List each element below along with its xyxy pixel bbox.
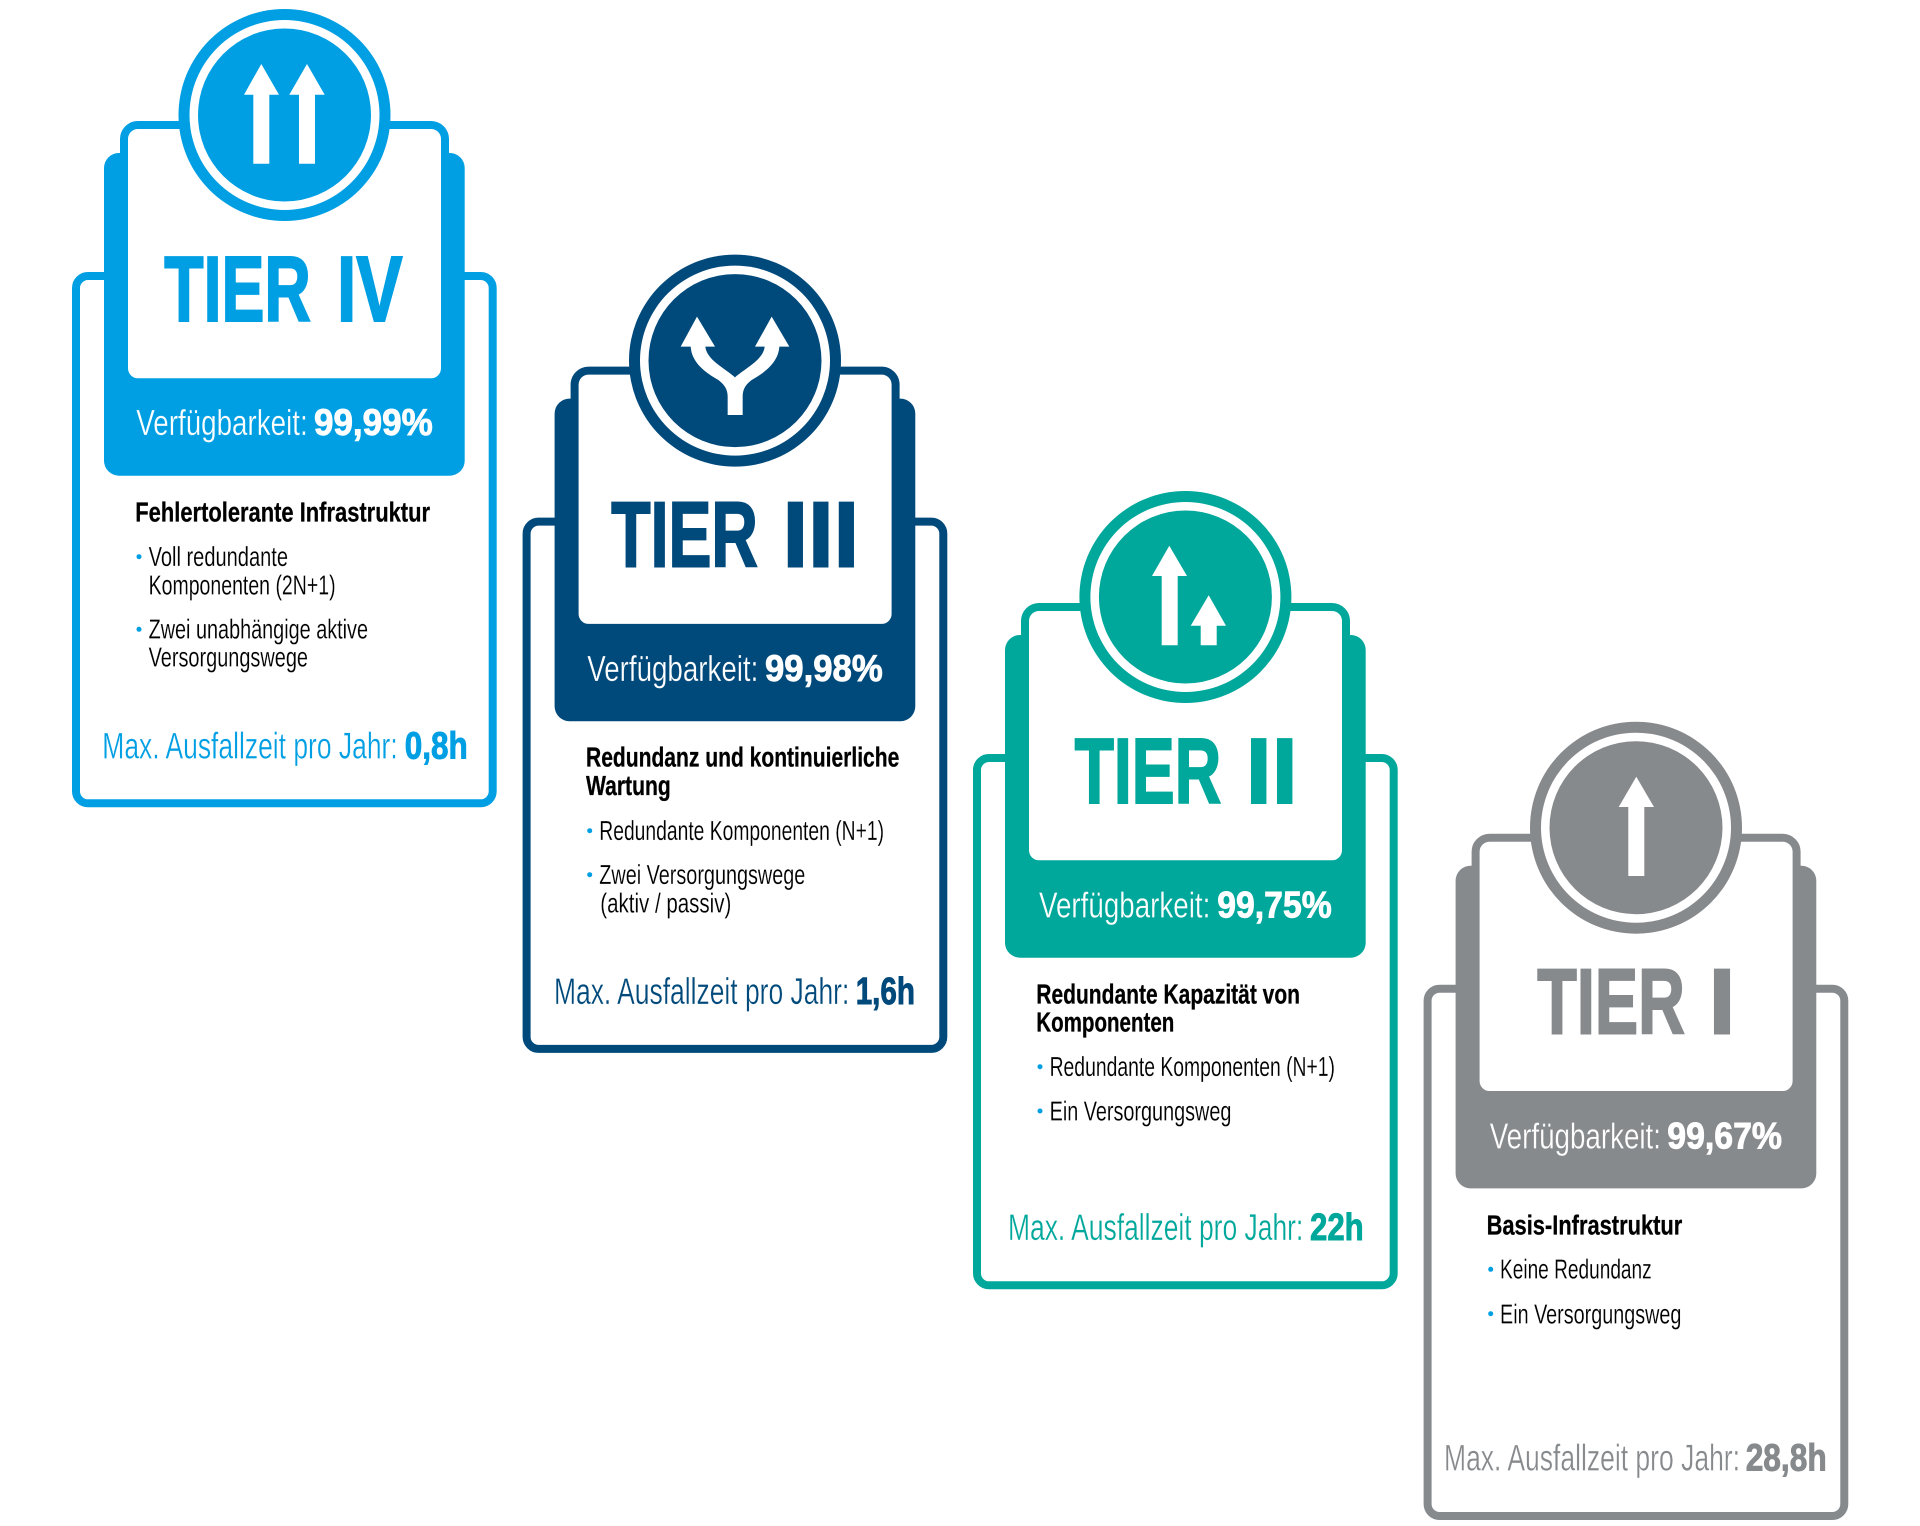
- heading: TIER II: TIER: [1075, 719, 1221, 823]
- bullet list: [587, 815, 884, 919]
- heading: TIER III: III: [783, 482, 859, 586]
- panel: Tier II: [977, 491, 1394, 1285]
- availability band: [1456, 866, 1816, 1188]
- availability label: Verfügbarkeit:: [1039, 885, 1210, 926]
- description heading: [586, 742, 899, 801]
- description heading: Redundanz und kontinuierliche: [586, 742, 899, 773]
- downtime value: 0,8h: [405, 725, 468, 767]
- description heading: Redundante Kapazität von: [1036, 978, 1300, 1009]
- card outline: [527, 522, 943, 1049]
- availability value: 99,98%: [765, 648, 883, 689]
- bullet list: (aktiv / passiv): [600, 888, 731, 919]
- description heading: [1036, 978, 1300, 1038]
- icon: single up arrow: [1530, 722, 1742, 934]
- heading: TIER I: TIER: [1537, 949, 1685, 1053]
- bullet list: Redundante Komponenten (N+1): [1050, 1051, 1335, 1082]
- title plate: [1025, 607, 1346, 864]
- title plate: [124, 125, 445, 382]
- availability band: [104, 153, 465, 476]
- bullet list: Zwei Versorgungswege: [599, 859, 805, 890]
- bullet list: Ein Versorgungsweg: [1050, 1095, 1231, 1126]
- downtime label: Max. Ausfallzeit pro Jahr:: [102, 724, 398, 766]
- icon: forking arrows: [629, 255, 841, 467]
- availability value: 99,67%: [1667, 1115, 1782, 1156]
- bullet list: Redundante Komponenten (N+1): [599, 815, 884, 846]
- description heading: Basis-Infrastruktur: [1487, 1209, 1682, 1240]
- card outline: [76, 276, 493, 803]
- downtime label: Max. Ausfallzeit pro Jahr:: [554, 970, 849, 1012]
- availability label: Verfügbarkeit:: [1490, 1115, 1661, 1156]
- availability value: 99,75%: [1217, 885, 1332, 926]
- title plate: [575, 371, 896, 628]
- bullet list: Ein Versorgungsweg: [1500, 1298, 1681, 1329]
- icon: two up arrows: [178, 9, 390, 221]
- card outline: [977, 758, 1394, 1285]
- heading: TIER III: TIER: [611, 482, 758, 586]
- bullet list: Zwei unabhängige aktive: [149, 614, 368, 645]
- panel: Tier III: [527, 255, 943, 1049]
- heading: TIER IV: IV: [337, 237, 403, 341]
- downtime value: 28,8h: [1746, 1438, 1827, 1480]
- panel: Tier IV: [76, 9, 493, 803]
- bullet list: Komponenten (2N+1): [149, 569, 336, 600]
- bullet list: Keine Redundanz: [1500, 1254, 1652, 1285]
- downtime label: Max. Ausfallzeit pro Jahr:: [1444, 1437, 1740, 1479]
- availability value: 99,99%: [314, 402, 433, 443]
- bullet list: [1038, 1051, 1335, 1126]
- bullet list: [1488, 1254, 1681, 1329]
- heading: TIER II: II: [1246, 719, 1298, 823]
- availability band: [555, 399, 915, 721]
- bullet list: Voll redundante: [149, 541, 288, 572]
- availability label: Verfügbarkeit:: [587, 648, 758, 689]
- card outline: [1428, 989, 1844, 1516]
- description heading: Wartung: [586, 770, 671, 801]
- description heading: Komponenten: [1036, 1007, 1174, 1038]
- heading: TIER IV: TIER: [164, 237, 311, 341]
- downtime value: 1,6h: [856, 971, 915, 1013]
- downtime label: Max. Ausfallzeit pro Jahr:: [1008, 1206, 1303, 1248]
- bullet list: [136, 541, 368, 673]
- availability label: Verfügbarkeit:: [136, 402, 308, 443]
- heading: TIER I: I: [1708, 949, 1736, 1053]
- availability band: [1005, 635, 1366, 958]
- panel: Tier I: [1428, 722, 1844, 1516]
- icon: long and short up arrows: [1079, 491, 1291, 703]
- description heading: Fehlertolerante Infrastruktur: [135, 497, 430, 528]
- bullet list: Versorgungswege: [149, 642, 308, 673]
- title plate: [1476, 838, 1797, 1095]
- downtime value: 22h: [1310, 1207, 1364, 1249]
